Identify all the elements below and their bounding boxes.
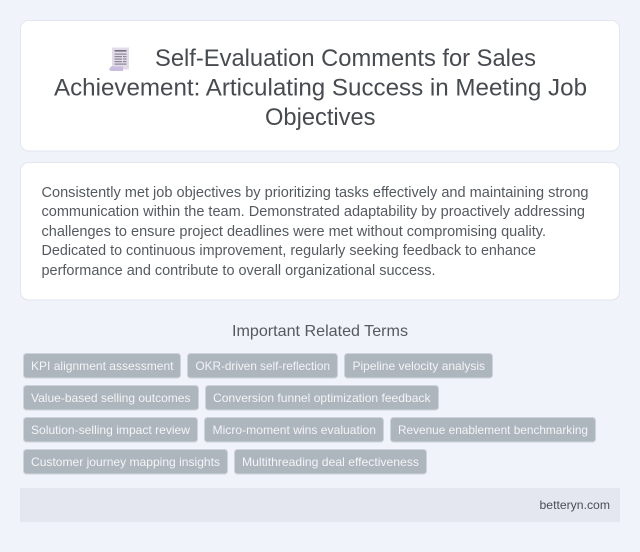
title: Objectives bbox=[265, 104, 376, 131]
title bbox=[54, 45, 587, 131]
summary text: performance and contribute to overall organizational success. bbox=[42, 263, 436, 279]
panel: title card bbox=[20, 20, 620, 151]
tag: Revenue enablement benchmarking bbox=[390, 418, 596, 442]
title: Achievement: Articulating Success in Meeting Job bbox=[54, 74, 587, 102]
tag: OKR-driven self-reflection: OKR-driven self-reflection bbox=[196, 359, 330, 373]
tag: Solution-selling impact review bbox=[24, 418, 198, 442]
tag: KPI alignment assessment bbox=[24, 354, 180, 378]
tag: Multithreading deal effectiveness bbox=[234, 450, 426, 474]
tag: Multithreading deal effectiveness: Multithreading deal effectiveness bbox=[242, 455, 419, 469]
tag: OKR-driven self-reflection bbox=[188, 354, 338, 378]
tag: Customer journey mapping insights: Customer journey mapping insights bbox=[31, 455, 220, 469]
tag: Revenue enablement benchmarking: Revenue enablement benchmarking bbox=[398, 423, 588, 437]
tag: Conversion funnel optimization feedback bbox=[206, 386, 438, 410]
tag: Value-based selling outcomes: Value-based selling outcomes bbox=[31, 391, 190, 405]
footer bar bbox=[20, 488, 620, 522]
tag: Customer journey mapping insights bbox=[24, 450, 228, 474]
tag: Pipeline velocity analysis: Pipeline velocity analysis bbox=[352, 359, 485, 373]
heading: important related terms: Important Related Terms bbox=[232, 323, 408, 340]
title: Self-Evaluation Comments for Sales bbox=[155, 45, 536, 72]
tag: KPI alignment assessment: KPI alignment assessment bbox=[31, 359, 174, 373]
footer credit: betteryn.com bbox=[540, 498, 610, 512]
summary text: communication within the team. Demonstrated adaptability by proactively addressing bbox=[42, 204, 585, 220]
tag: Solution-selling impact review: Solution-selling impact review bbox=[31, 423, 190, 437]
tag: Conversion funnel optimization feedback: Conversion funnel optimization feedback bbox=[213, 391, 431, 405]
tag: Pipeline velocity analysis bbox=[344, 354, 492, 378]
panel: related term tags bbox=[24, 354, 596, 474]
tag: Micro-moment wins evaluation bbox=[204, 418, 384, 442]
panel: summary card bbox=[20, 162, 620, 300]
summary text bbox=[42, 185, 588, 279]
summary text: challenges to ensure project deadlines were met without compromising quality. bbox=[42, 224, 546, 240]
tag: Value-based selling outcomes bbox=[24, 386, 198, 410]
tag: Micro-moment wins evaluation: Micro-moment wins evaluation bbox=[212, 423, 376, 437]
summary text: Consistently met job objectives by prioritizing tasks effectively and maintaining strong bbox=[42, 185, 588, 201]
icon: document receipt bbox=[109, 48, 129, 71]
summary text: Dedicated to continuous improvement, regularly seeking feedback to enhance bbox=[42, 243, 536, 259]
